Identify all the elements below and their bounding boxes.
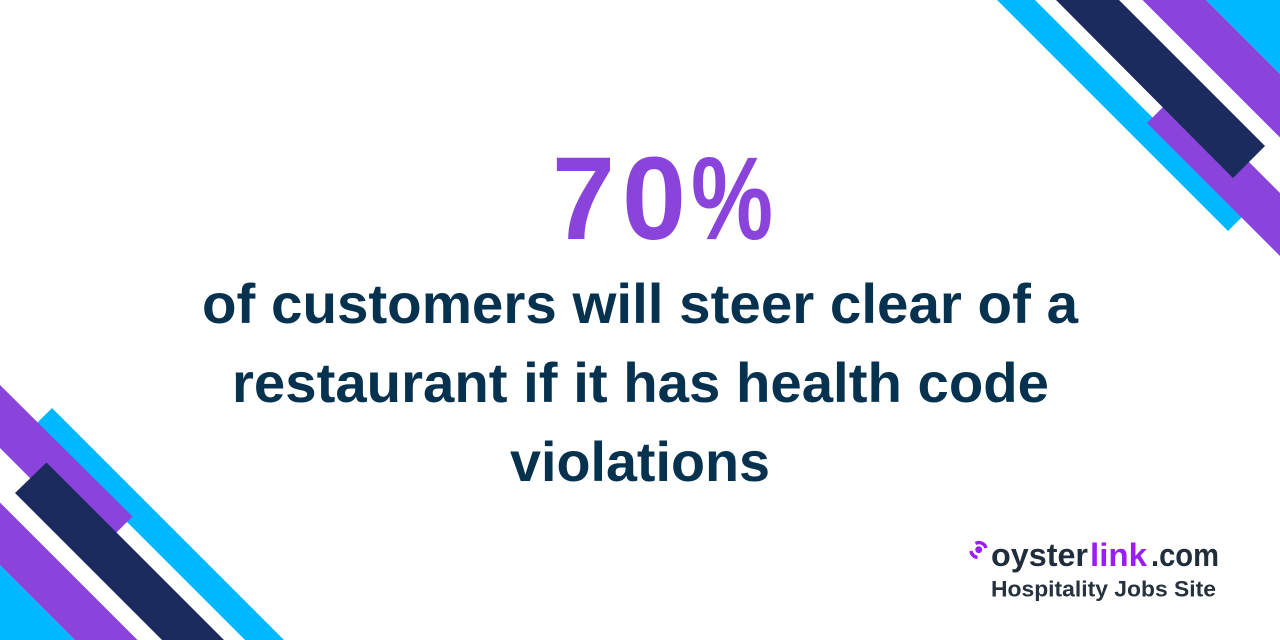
decoration: top right diagonal bands <box>997 0 1280 256</box>
statement text: violations <box>510 430 770 493</box>
logo wordmark <box>991 537 1219 573</box>
icon: oyster pearl <box>971 543 986 558</box>
big statistic: 70%: % <box>691 133 773 265</box>
decoration: bottom left diagonal bands <box>0 385 284 640</box>
logo: oysterlink <box>971 537 1219 602</box>
logo tagline: Hospitality Jobs Site <box>991 576 1216 602</box>
logo wordmark: oyster <box>991 537 1088 573</box>
statement text <box>202 272 1079 493</box>
statement text: restaurant if it has health code <box>232 351 1049 414</box>
big statistic: 70%: 0 <box>622 133 686 265</box>
logo wordmark: link <box>1090 537 1147 573</box>
logo wordmark: .com <box>1151 537 1219 573</box>
statement text: of customers will steer clear of a <box>202 272 1079 335</box>
big statistic: 70% <box>552 133 773 265</box>
big statistic: 70%: 7 <box>552 133 615 265</box>
